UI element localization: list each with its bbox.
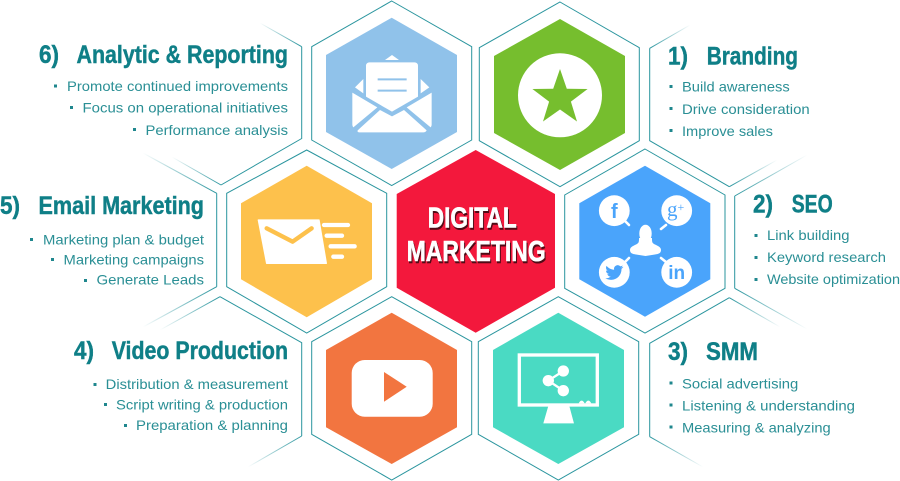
list: seo items: Link building — [767, 227, 850, 243]
text block: 6 analytic and reporting — [39, 41, 288, 138]
icon: social network person — [599, 195, 692, 288]
list: analytic items: Performance analysis — [146, 122, 288, 138]
heading: digital marketing — [407, 202, 546, 268]
heading: branding: Branding — [707, 42, 798, 70]
list: video items — [94, 376, 288, 433]
icon: social network person: g — [667, 197, 678, 221]
outer faded hexagon outlines — [143, 23, 807, 467]
list: seo items: Website optimization — [767, 271, 900, 287]
heading: digital marketing: MARKETING — [407, 236, 546, 268]
list: seo items — [754, 227, 900, 287]
list: email items: Marketing campaigns — [64, 251, 204, 267]
heading: email marketing: 5) — [0, 192, 20, 220]
list: analytic items: Promote continued improvements — [67, 78, 288, 94]
heading: video production: Video Production — [112, 337, 288, 365]
icon: star in circle — [518, 53, 602, 137]
text block: 1 branding — [668, 42, 810, 139]
text block: 4 video production — [74, 337, 288, 433]
panel: branding hexagon — [479, 2, 639, 187]
list: video items: Script writing & production — [116, 396, 288, 412]
list: video items: Distribution & measurement — [106, 376, 288, 392]
panel: centre hexagon — [397, 150, 555, 333]
list: analytic items: Focus on operational initiatives — [82, 100, 288, 116]
list: analytic items — [54, 78, 288, 138]
icon: play button — [352, 360, 433, 417]
list: branding items: Build awareness — [682, 79, 790, 95]
heading: email marketing: Email Marketing — [38, 192, 204, 220]
icon: monitor with share symbol — [519, 355, 597, 423]
list: email items: Marketing plan & budget — [43, 231, 204, 247]
list: email items: Generate Leads — [96, 272, 204, 288]
heading: seo — [753, 191, 833, 219]
heading: branding — [668, 42, 798, 70]
text block: 3 smm — [668, 338, 855, 435]
heading: smm: SMM — [706, 338, 758, 366]
list: smm items: Social advertising — [682, 375, 798, 391]
text block: 2 seo — [753, 191, 900, 287]
list: branding items: Drive consideration — [682, 101, 810, 117]
list: branding items: Improve sales — [682, 123, 773, 139]
heading: branding: 1) — [668, 42, 688, 70]
list: smm items: Listening & understanding — [682, 397, 855, 413]
icon: open envelope — [352, 55, 432, 132]
heading: digital marketing: DIGITAL — [428, 202, 517, 234]
heading: seo: 2) — [753, 191, 773, 219]
heading: analytic and reporting: Analytic & Reporting — [76, 41, 288, 69]
list: branding items — [670, 79, 810, 139]
heading: video production: 4) — [74, 337, 94, 365]
list: email items — [30, 231, 204, 288]
text block: 5 email marketing — [0, 192, 204, 288]
heading: smm — [668, 338, 758, 366]
heading: analytic and reporting: 6) — [39, 41, 59, 69]
panel: analytic hexagon — [312, 1, 472, 186]
list: video items: Preparation & planning — [136, 417, 288, 433]
panel: seo hexagon — [565, 149, 725, 333]
list: seo items: Keyword research — [767, 249, 886, 265]
icon: social network person: in — [668, 263, 685, 284]
panel: video hexagon — [312, 297, 472, 480]
list: smm items: Measuring & analyzing — [682, 419, 831, 435]
icon: social network person: + — [678, 200, 684, 214]
heading: smm: 3) — [668, 338, 688, 366]
icon: social network person: f — [611, 201, 618, 223]
panel: smm hexagon — [478, 297, 639, 480]
panel: email hexagon — [227, 150, 387, 333]
list: smm items — [670, 375, 855, 435]
icon: sending mail — [258, 220, 355, 263]
heading: seo: SEO — [792, 191, 833, 219]
